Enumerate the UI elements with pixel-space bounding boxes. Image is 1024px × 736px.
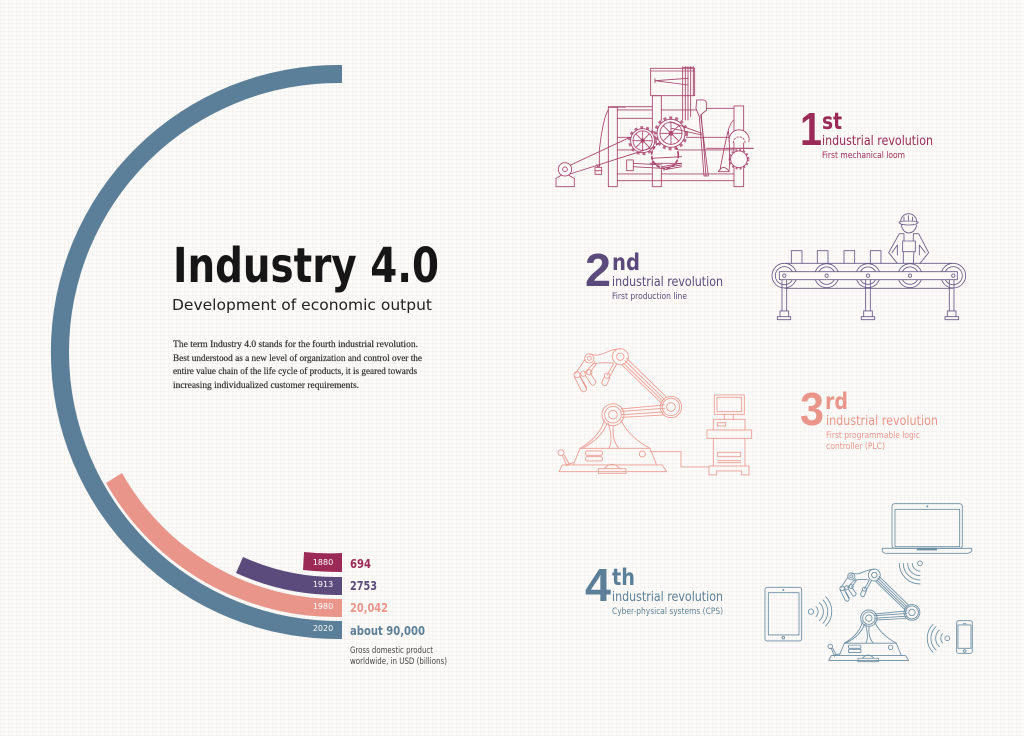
wifi: phone (927, 624, 950, 652)
gear: lower (650, 142, 682, 170)
intro paragraph: entire value chain of the life cycle of products, it is geared towards (173, 366, 417, 377)
robot arm (558, 349, 682, 473)
controller (707, 395, 752, 475)
label: 1st revolution (800, 103, 933, 161)
arc: 1913 GDP (236, 557, 342, 595)
year label: 1880: 1880 (313, 558, 333, 567)
worker (889, 214, 929, 263)
icon: robot arm and PLC controller (558, 349, 752, 475)
gear: large (655, 118, 687, 149)
label: 2nd revolution: 2 (585, 244, 611, 296)
value: 2753: 2753 (350, 579, 377, 593)
label: 4th revolution: industrial revolution (612, 590, 723, 605)
robot arm (828, 569, 920, 662)
label: 1st revolution: First mechanical loom (822, 151, 905, 161)
label: 1st revolution: st (822, 109, 842, 135)
year label: 1980: 1980 (313, 602, 333, 611)
intro paragraph: The term Industry 4.0 stands for the fourth industrial revolution. (173, 339, 418, 350)
gear: left (629, 127, 656, 154)
label: 4th revolution: th (612, 565, 635, 591)
cable (650, 452, 709, 467)
chart: economic output arcs (51, 65, 447, 667)
chart caption: Gross domestic product (350, 646, 434, 656)
icon: mechanical loom (556, 67, 753, 187)
label: 3rd revolution: 3 (800, 383, 824, 435)
rollers (772, 263, 966, 288)
value: about 90,000: about 90,000 (350, 624, 425, 638)
label: 3rd revolution: First programmable logic (826, 431, 920, 441)
label: 3rd revolution (800, 383, 938, 452)
chart caption: worldwide, in USD (billions) (350, 657, 447, 667)
laptop (882, 504, 972, 553)
icon: cyber-physical systems (765, 504, 972, 662)
gears: right (718, 121, 753, 172)
phone (957, 621, 972, 653)
value: 20,042: 20,042 (350, 601, 388, 615)
label: 4th revolution: 4 (585, 559, 611, 611)
label: 2nd revolution: industrial revolution (612, 275, 723, 290)
value: 694: 694 (350, 557, 371, 571)
boxes (791, 251, 881, 263)
year label: 1913: 1913 (313, 580, 333, 589)
title: Industry 4.0 (173, 238, 439, 294)
label: 1st revolution: 1 (800, 103, 822, 155)
intro paragraph: increasing individualized customer requirements. (173, 381, 359, 391)
label: 1st revolution: industrial revolution (822, 134, 933, 149)
wifi: tablet (808, 597, 832, 626)
drive rod (670, 122, 702, 135)
label: 4th revolution (585, 559, 723, 617)
label: 4th revolution: Cyber-physical systems (CPS) (612, 607, 723, 617)
subtitle: Development of economic output (172, 296, 432, 314)
arc: 1880 GDP (303, 552, 342, 572)
pulley and belts (556, 137, 682, 187)
tablet (765, 587, 802, 641)
legs (777, 280, 959, 320)
label: 3rd revolution: rd (825, 389, 848, 415)
label: 2nd revolution: nd (612, 250, 640, 276)
label: 3rd revolution: controller (PLC) (826, 442, 885, 452)
intro paragraph (173, 339, 422, 391)
chart caption (350, 646, 447, 667)
icon: conveyor line with worker (772, 214, 966, 320)
arc: 1980 GDP (106, 473, 342, 617)
year label: 2020: 2020 (313, 624, 333, 633)
label: 2nd revolution (585, 244, 723, 302)
label: 3rd revolution: industrial revolution (826, 414, 938, 429)
wifi: laptop (899, 561, 922, 584)
intro paragraph: Best understood as a new level of organization and control over the (173, 353, 422, 364)
arc: 2020 GDP (51, 65, 342, 639)
belt (785, 263, 953, 288)
label: 2nd revolution: First production line (612, 292, 687, 302)
